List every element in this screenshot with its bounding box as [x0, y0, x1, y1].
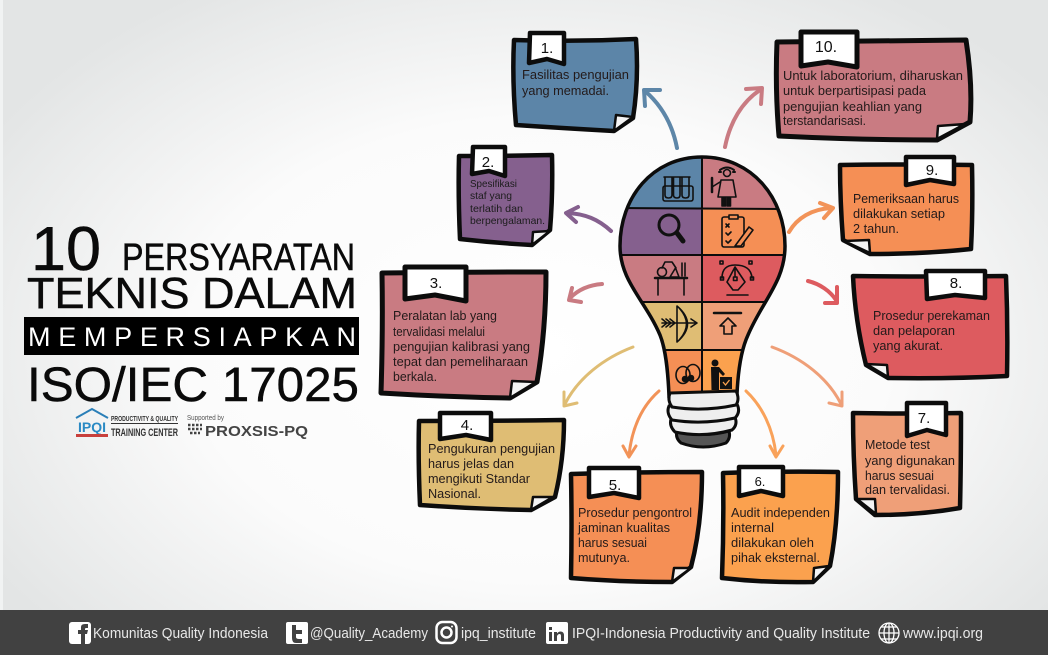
- icon: pen tool: [720, 261, 754, 295]
- panel: note 3: tepat dan pemeliharaan: [393, 354, 528, 369]
- panel: note 2: [459, 147, 552, 245]
- footer bar: IPQI-Indonesia Productivity and Quality Institute: [572, 625, 870, 642]
- panel: note 1: 1.: [541, 40, 553, 57]
- footer bar: www.ipqi.org: [902, 625, 983, 642]
- panel: note 10: 10.: [815, 39, 837, 56]
- panel: note 2: terlatih dan: [470, 203, 523, 215]
- panel: note 9: Pemeriksaan harus: [853, 191, 959, 206]
- panel: note 6: internal: [731, 520, 774, 535]
- panel: note 7: 7.: [918, 410, 930, 427]
- panel: note 4: mengikuti Standar: [428, 471, 531, 486]
- panel: note 5: mutunya.: [578, 550, 630, 565]
- arrow: to note 8: [808, 281, 837, 303]
- logo: IPQI training center: [76, 409, 178, 439]
- arrow: to note 6: [746, 391, 783, 457]
- footer bar: @Quality_Academy: [310, 625, 428, 642]
- panel: note 6: [722, 467, 838, 582]
- panel: note 3: 3.: [430, 275, 442, 292]
- icon: linkedin: [546, 622, 568, 644]
- icon: magnifier: [659, 215, 683, 241]
- icon: lab table: [655, 262, 687, 295]
- arrow: to note 3: [569, 284, 602, 302]
- panel: note 10: [776, 32, 971, 140]
- icon: up arrow: [714, 313, 741, 334]
- arrow: to note 5: [623, 391, 659, 457]
- panel: note 5: jaminan kualitas: [577, 520, 670, 535]
- title: 10: [31, 215, 101, 284]
- panel: note 6: dilakukan oleh: [731, 535, 814, 550]
- icon: twitter: [286, 622, 308, 644]
- icon: eyes: [676, 364, 700, 384]
- arrow: to note 2: [566, 207, 611, 231]
- logo: supported by Proxsis-PQ: [187, 415, 308, 440]
- title: PERSYARATAN: [122, 237, 355, 279]
- panel: note 4: harus jelas dan: [428, 456, 514, 471]
- panel: note 8: 8.: [950, 275, 962, 292]
- footer bar: Komunitas Quality Indonesia: [93, 625, 269, 642]
- panel: note 10: terstandarisasi.: [783, 113, 866, 128]
- panel: note 5: Prosedur pengontrol: [578, 505, 692, 520]
- panel: note 7: Metode test: [865, 437, 930, 452]
- panel: note 5: [571, 468, 702, 582]
- panel: note 4: Pengukuran pengujian: [428, 441, 555, 456]
- panel: note 9: dilakukan setiap: [853, 206, 945, 221]
- panel: note 5: harus sesuai: [578, 535, 647, 550]
- icon: test tubes: [663, 177, 693, 201]
- panel: note 2: 2.: [482, 154, 494, 171]
- panel: note 3: Peralatan lab yang: [393, 308, 497, 323]
- panel: note 10: pengujian keahlian yang: [783, 99, 922, 114]
- panel: note 4: 4.: [461, 417, 473, 434]
- panel: note 5: 5.: [609, 477, 621, 494]
- panel: note 9: 2 tahun.: [853, 221, 899, 236]
- logo: IPQI training center: IPQI: [78, 419, 106, 435]
- icon: clipboard and pen: [722, 215, 753, 247]
- title: ISO/IEC 17025: [27, 359, 359, 412]
- panel: note 3: pengujian kalibrasi yang: [393, 339, 530, 354]
- panel: note 3: tervalidasi melalui: [393, 324, 485, 339]
- panel: note 8: yang akurat.: [873, 338, 943, 353]
- panel: note 1: [513, 33, 637, 131]
- panel: note 10: untuk berpartisipasi pada: [783, 83, 927, 98]
- panel: note 6: 6.: [755, 474, 765, 489]
- arrow: to note 10: [725, 88, 762, 147]
- panel: note 6: Audit independen: [731, 505, 830, 520]
- icon: globe: [879, 623, 899, 643]
- logo: supported by Proxsis-PQ: PROXSIS-PQ: [205, 423, 308, 440]
- arrow: to note 1: [644, 90, 677, 148]
- light bulb: [615, 150, 792, 447]
- icon: facebook: [69, 622, 91, 644]
- icon: bow and arrow: [662, 306, 697, 342]
- panel: note 7: [853, 403, 961, 515]
- panel: note 1: Fasilitas pengujian: [522, 67, 629, 82]
- panel: note 6: pihak eksternal.: [731, 550, 820, 565]
- panel: note 9: [840, 157, 972, 254]
- panel: note 10: Untuk laboratorium, diharuskan: [783, 68, 963, 83]
- panel: note 8: [853, 271, 1007, 378]
- title: [24, 215, 359, 412]
- footer bar: ipq_institute: [461, 625, 536, 642]
- panel: note 7: dan tervalidasi.: [865, 482, 950, 497]
- panel: note 7: yang digunakan: [865, 453, 955, 468]
- footer bar: [0, 610, 1048, 655]
- panel: note 7: harus sesuai: [865, 468, 934, 483]
- panel: note 1: yang memadai.: [522, 83, 609, 98]
- arrow: to note 4: [564, 347, 633, 406]
- title: TEKNIS DALAM: [27, 269, 357, 318]
- panel: note 8: Prosedur perekaman: [873, 308, 990, 323]
- panel: note 4: Nasional.: [428, 486, 481, 501]
- logo: IPQI training center: TRAINING CENTER: [111, 427, 178, 439]
- panel: note 2: berpengalaman.: [470, 215, 545, 227]
- panel: note 8: dan pelaporan: [873, 323, 955, 338]
- arrow: to note 7: [772, 347, 842, 406]
- panel: note 2: Spesifikasi: [470, 178, 517, 190]
- panel: note 4: [419, 413, 564, 510]
- icon: scientist: [712, 168, 736, 206]
- arrow: to note 9: [789, 203, 833, 232]
- logo: IPQI training center: PRODUCTIVITY & QUALITY: [111, 414, 178, 423]
- icon: man with check box: [711, 360, 732, 390]
- logo: supported by Proxsis-PQ: Supported by: [187, 415, 224, 422]
- panel: note 2: staf yang: [470, 190, 512, 202]
- panel: note 9: 9.: [926, 162, 938, 179]
- panel: note 3: berkala.: [393, 369, 437, 384]
- title: MEMPERSIAPKAN: [28, 322, 356, 352]
- bulb screw base: [668, 391, 739, 447]
- panel: note 3: [381, 267, 546, 398]
- icon: instagram: [436, 622, 456, 643]
